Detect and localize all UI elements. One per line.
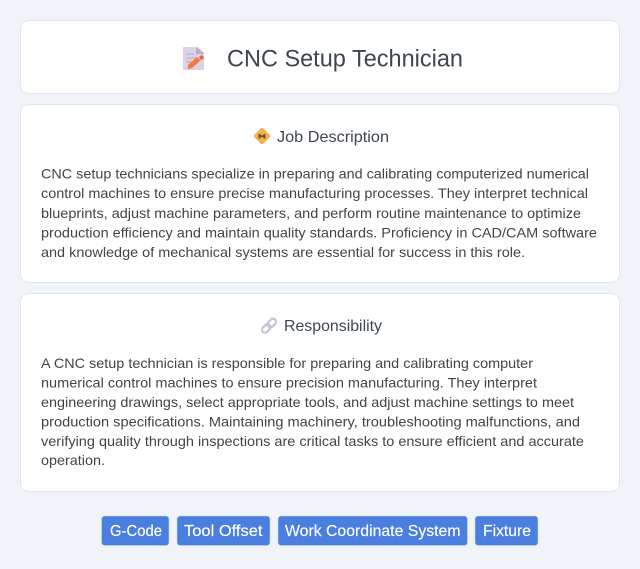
tag: Fixture: Fixture xyxy=(483,523,531,540)
title: CNC Setup Technician xyxy=(227,46,463,72)
text block: job description: production efficiency and maintain quality standards. Proficiency in CAD/CAM software xyxy=(41,224,597,240)
tag: Work Coordinate System xyxy=(278,516,468,546)
text block: responsibility: production specifications. Maintaining machinery, troubleshooting malfunctions, and xyxy=(41,414,580,430)
text block: responsibility: operation. xyxy=(41,452,105,468)
text block: job description: blueprints, adjust machine parameters, and perform routine maintenance to optimize xyxy=(41,205,581,221)
text block: job description: and knowledge of mechanical systems are essential for success in this role. xyxy=(41,244,525,260)
panel: job description xyxy=(20,104,620,282)
text block: job description: CNC setup technicians specialize in preparing and calibrating computerized numerical xyxy=(41,166,589,182)
text block: job description xyxy=(41,166,597,260)
tag: G-Code xyxy=(102,516,169,546)
tag: Tool Offset: Tool Offset xyxy=(184,523,263,540)
text block: job description: control machines to ensure precise manufacturing processes. They interpret technical xyxy=(41,185,588,201)
tag: Fixture xyxy=(475,516,538,546)
text block: responsibility xyxy=(41,355,584,468)
panel: title card xyxy=(20,20,620,94)
text block: responsibility: numerical control machines to ensure precision manufacturing. They interpret xyxy=(41,374,537,390)
tag: Tool Offset xyxy=(177,516,270,546)
tags row xyxy=(102,516,538,546)
text block: responsibility: A CNC setup technician is responsible for preparing and calibrating computer xyxy=(41,355,533,371)
heading: responsibility: Responsibility xyxy=(284,318,382,335)
icon: document with pencil xyxy=(183,47,204,70)
text block: responsibility: verifying quality through inspections are critical tasks to ensure efficient and accurate xyxy=(41,433,584,449)
tag: Work Coordinate System: Work Coordinate System xyxy=(285,523,460,540)
panel: responsibility xyxy=(20,294,620,492)
text block: responsibility: engineering drawings, select appropriate tools, and adjust machine settings to meet xyxy=(41,394,574,410)
tag: G-Code: G-Code xyxy=(110,523,162,540)
icon: chain link xyxy=(261,317,277,334)
icon: road sign diamond xyxy=(253,127,271,145)
heading: job description: Job Description xyxy=(277,129,389,146)
